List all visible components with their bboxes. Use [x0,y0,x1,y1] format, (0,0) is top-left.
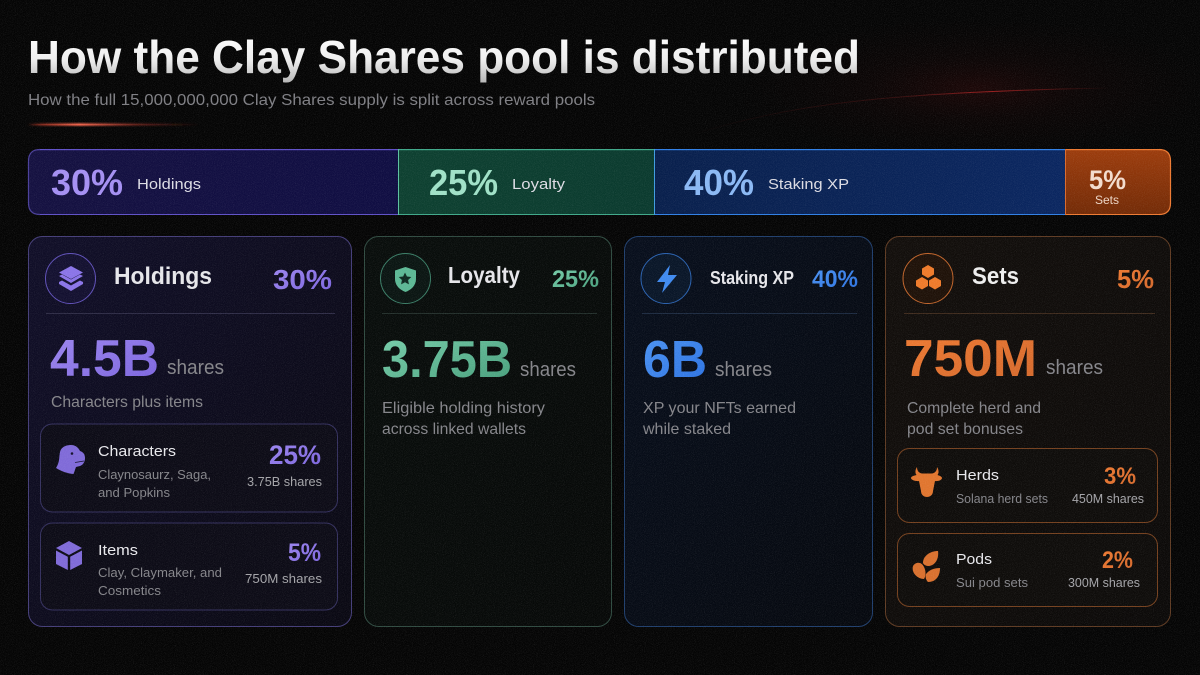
bar segment: loyalty: Loyalty [512,176,566,193]
bar segment: staking xp: Staking XP [768,176,849,193]
icon: layers [46,254,96,304]
share count: pods: 300M shares [1068,575,1140,590]
bar segment: staking xp: 40% [684,162,754,203]
description: loyalty: Eligible holding history [382,400,545,417]
percent: herds: 3% [1104,463,1136,490]
amount: staking xp: 6B [643,331,707,389]
description: loyalty [382,400,545,438]
unit: shares: shares [1046,357,1103,379]
percent: staking xp: 40% [812,266,858,293]
amount: holdings: 4.5B [50,330,159,388]
sub-panel: characters [40,424,338,512]
bar segment: sets: Sets [1095,193,1119,207]
description: pods: Sui pod sets [956,575,1029,590]
accent line [28,123,200,126]
name: herds: Herds [956,467,999,484]
icon: shield star [380,254,430,304]
icon: lightning bolt [641,254,691,304]
name: items: Items [98,542,138,559]
percent: pods: 2% [1102,547,1133,574]
icon: cow head [911,467,942,497]
percent: loyalty: 25% [552,266,599,293]
description: sets: Complete herd and [907,400,1041,417]
percent: sets: 5% [1117,264,1154,294]
description: characters: and Popkins [98,485,170,500]
unit: shares: shares [520,359,576,381]
icon: hexagons [903,254,953,304]
icon: cube [56,541,82,570]
heading: loyalty: Loyalty [448,262,520,288]
sub-panel: pods [898,534,1158,606]
description: sets [907,400,1041,438]
sub-panel: herds [898,448,1158,522]
sub-panel: items [40,523,338,610]
panel: sets [886,236,1170,626]
panel: holdings [28,236,352,626]
heading: holdings: Holdings [114,263,212,290]
icon: pods [913,551,940,582]
panel: loyalty [364,236,612,626]
description: holdings: Characters plus items [51,394,203,411]
icon: dinosaur [56,445,85,474]
heading: sets: Sets [972,263,1019,290]
percent: holdings: 30% [273,264,332,295]
description: sets: pod set bonuses [907,421,1023,438]
bar segment: sets: 5% [1089,165,1126,195]
bar segment: holdings: 30% [51,162,123,203]
share count: characters: 3.75B shares [247,474,322,489]
bar segment: holdings: Holdings [137,176,201,193]
percent: characters: 25% [269,440,321,470]
percent: items: 5% [288,539,321,567]
heading: staking xp: Staking XP [710,268,794,288]
name: characters: Characters [98,443,176,460]
title: How the Clay Shares pool is distributed [28,31,860,83]
share count: herds: 450M shares [1072,491,1144,506]
bar segment: loyalty [398,149,654,215]
description: loyalty: across linked wallets [382,421,526,438]
unit: shares: shares [715,359,772,381]
description: characters: Claynosaurz, Saga, [98,467,211,482]
share count: items: 750M shares [245,571,323,586]
description: staking xp [642,400,796,438]
panel: staking xp [624,236,872,626]
description: items [98,565,222,598]
bar segment: sets [1065,149,1171,215]
amount: sets: 750M [904,330,1037,388]
bar segment: holdings [28,149,398,215]
stacked distribution bar [28,149,1171,215]
subtitle: How the full 15,000,000,000 Clay Shares supply is split across reward pools [28,92,595,109]
description: items: Clay, Claymaker, and [98,565,222,580]
description: staking xp: while staked [642,421,731,438]
bar segment: staking xp [654,149,1065,215]
amount: loyalty: 3.75B [382,331,512,389]
unit: shares: shares [167,357,224,379]
bar segment: loyalty: 25% [429,162,498,203]
description: staking xp: XP your NFTs earned [643,400,796,417]
name: pods: Pods [956,551,992,568]
description: herds: Solana herd sets [956,491,1048,506]
description: characters [98,467,211,500]
description: items: Cosmetics [98,583,162,598]
